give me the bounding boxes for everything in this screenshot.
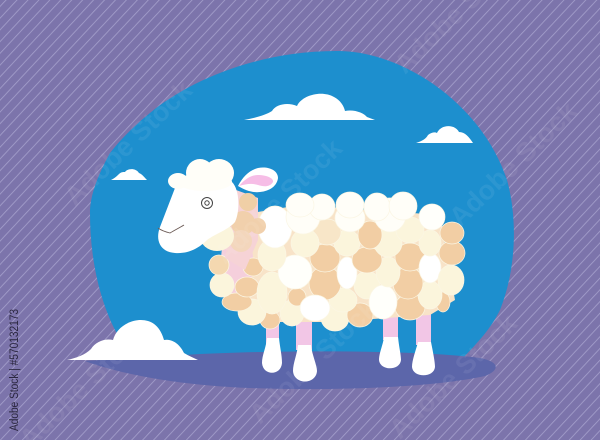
cloud: top right xyxy=(416,126,473,143)
faint diagonal watermarks: Adobe Stock xyxy=(243,292,384,429)
faint diagonal watermarks: Adobe Stock xyxy=(208,132,349,269)
back left leg xyxy=(379,310,401,368)
blue circle backdrop xyxy=(90,51,514,358)
sheep xyxy=(158,159,465,382)
front left leg xyxy=(262,315,282,373)
ground shadow xyxy=(85,351,496,389)
ear xyxy=(238,167,278,192)
mouth xyxy=(158,225,184,233)
faint diagonal watermarks: Adobe Stock xyxy=(58,74,199,211)
cloud: bottom left xyxy=(67,320,198,360)
front right leg xyxy=(293,315,317,382)
watermark credit: Adobe Stock | #570132173 xyxy=(9,309,21,431)
faint diagonal watermarks: Adobe Stock xyxy=(443,95,584,232)
head xyxy=(158,159,238,253)
wool body xyxy=(209,192,465,331)
neck wool xyxy=(200,190,266,270)
head wool tuft xyxy=(168,159,234,191)
cloud: small left xyxy=(111,169,147,180)
cloud: top centre xyxy=(244,94,375,120)
back right leg xyxy=(412,305,435,375)
eye xyxy=(202,198,212,208)
